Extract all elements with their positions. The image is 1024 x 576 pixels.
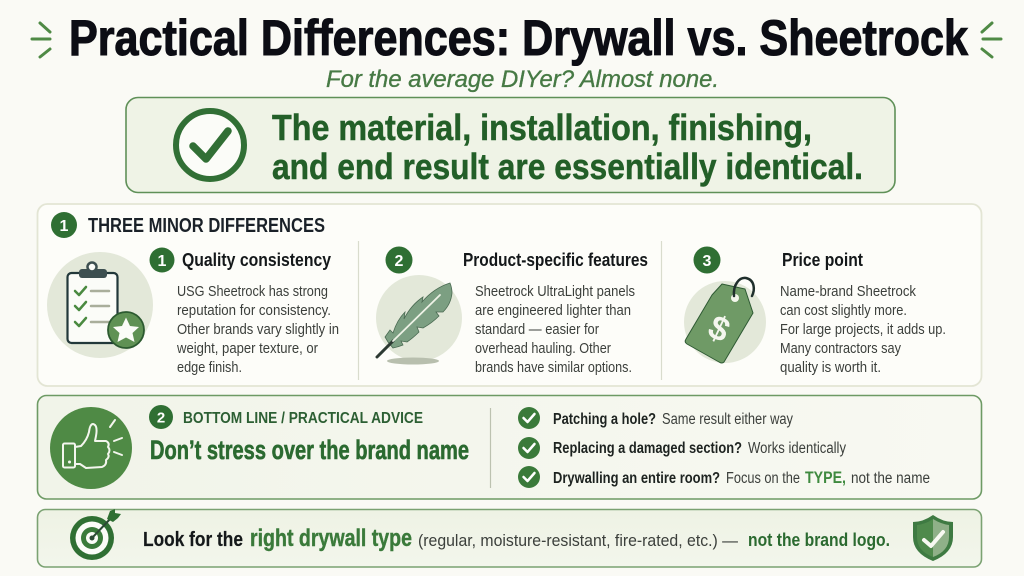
item 3: price point: For large projects, it adds up. [780, 322, 946, 338]
key message text [272, 107, 863, 187]
item 2: product-specific features: Product-specific features [463, 250, 648, 270]
checklist row 1: Patching a hole? [553, 411, 656, 428]
icon: left title sparks [32, 23, 50, 57]
item 3: price point [694, 246, 946, 376]
icon: shield with check [913, 515, 953, 561]
item 2: product-specific features [386, 246, 648, 376]
item 2: product-specific features: brands have similar options. [475, 360, 632, 376]
icon: price tag: $ [702, 308, 736, 350]
checklist row 1 [518, 407, 793, 429]
takeaway text [143, 525, 890, 552]
advice headline: Don’t stress over the brand name [150, 435, 469, 465]
subtitle: For the average DIYer? Almost none. [326, 66, 719, 93]
takeaway text: Look for the [143, 529, 243, 551]
item 2: product-specific features: overhead hauling. Other [475, 341, 611, 357]
item 3: price point: 3 [703, 253, 712, 270]
section heading: BOTTOM LINE / PRACTICAL ADVICE [183, 410, 423, 427]
icon: target with arrow [70, 509, 121, 560]
checklist row 1: Same result either way [662, 411, 793, 428]
section heading [51, 212, 325, 238]
checklist row 3 [518, 466, 930, 488]
item 1: quality consistency: edge finish. [177, 360, 242, 376]
section heading: 2 [157, 410, 165, 426]
key message text: and end result are essentially identical. [272, 146, 863, 187]
section heading: THREE MINOR DIFFERENCES [88, 215, 325, 237]
takeaway text: (regular, moisture-resistant, fire-rated, etc.) — [418, 531, 738, 550]
panel: bottom line [38, 396, 982, 499]
item 2: product-specific features: Sheetrock UltraLight panels [475, 284, 635, 300]
item 2: product-specific features: 2 [395, 253, 404, 270]
item 3: price point: Name-brand Sheetrock [780, 284, 917, 300]
item 2: product-specific features: are engineered lighter than [475, 303, 631, 319]
checklist row 2: Replacing a damaged section? [553, 440, 742, 457]
checklist row 3: TYPE, [805, 468, 846, 487]
item 2: product-specific features: standard — easier for [475, 322, 599, 338]
takeaway text: not the brand logo. [748, 530, 890, 550]
key message text: The material, installation, finishing, [272, 107, 812, 148]
checklist row 2: Works identically [748, 440, 846, 457]
checklist row 3: not the name [851, 470, 930, 487]
section heading [149, 405, 423, 429]
item 3: price point: Price point [782, 250, 863, 270]
icon: right title sparks [982, 23, 1001, 57]
icon: clipboard with star [47, 252, 153, 358]
item 1: quality consistency: Other brands vary slightly in [177, 322, 339, 338]
item 1: quality consistency: Quality consistency [182, 250, 331, 270]
checklist row 3: Drywalling an entire room? [553, 470, 720, 487]
item 1: quality consistency: weight, paper texture, or [176, 341, 318, 357]
icon: price tag [684, 278, 766, 363]
item 1: quality consistency: USG Sheetrock has strong [177, 284, 328, 300]
item 3: price point: can cost slightly more. [780, 303, 907, 319]
takeaway text: right drywall type [250, 525, 412, 552]
panel: three minor differences [38, 204, 982, 386]
icon: feather [376, 275, 462, 364]
panel: key message [126, 98, 895, 192]
item 3: price point: Many contractors say [780, 341, 902, 357]
icon: thumbs up [50, 407, 132, 489]
item 3: price point: quality is worth it. [780, 360, 881, 376]
checklist row 2 [518, 437, 846, 459]
icon: large check circle [176, 111, 244, 179]
section heading: 1 [60, 218, 69, 235]
item 1: quality consistency [150, 248, 339, 376]
checklist row 3: Focus on the [726, 470, 800, 487]
item 1: quality consistency: 1 [158, 253, 167, 270]
item 1: quality consistency: reputation for consistency. [177, 303, 331, 319]
panel: takeaway [38, 509, 982, 567]
